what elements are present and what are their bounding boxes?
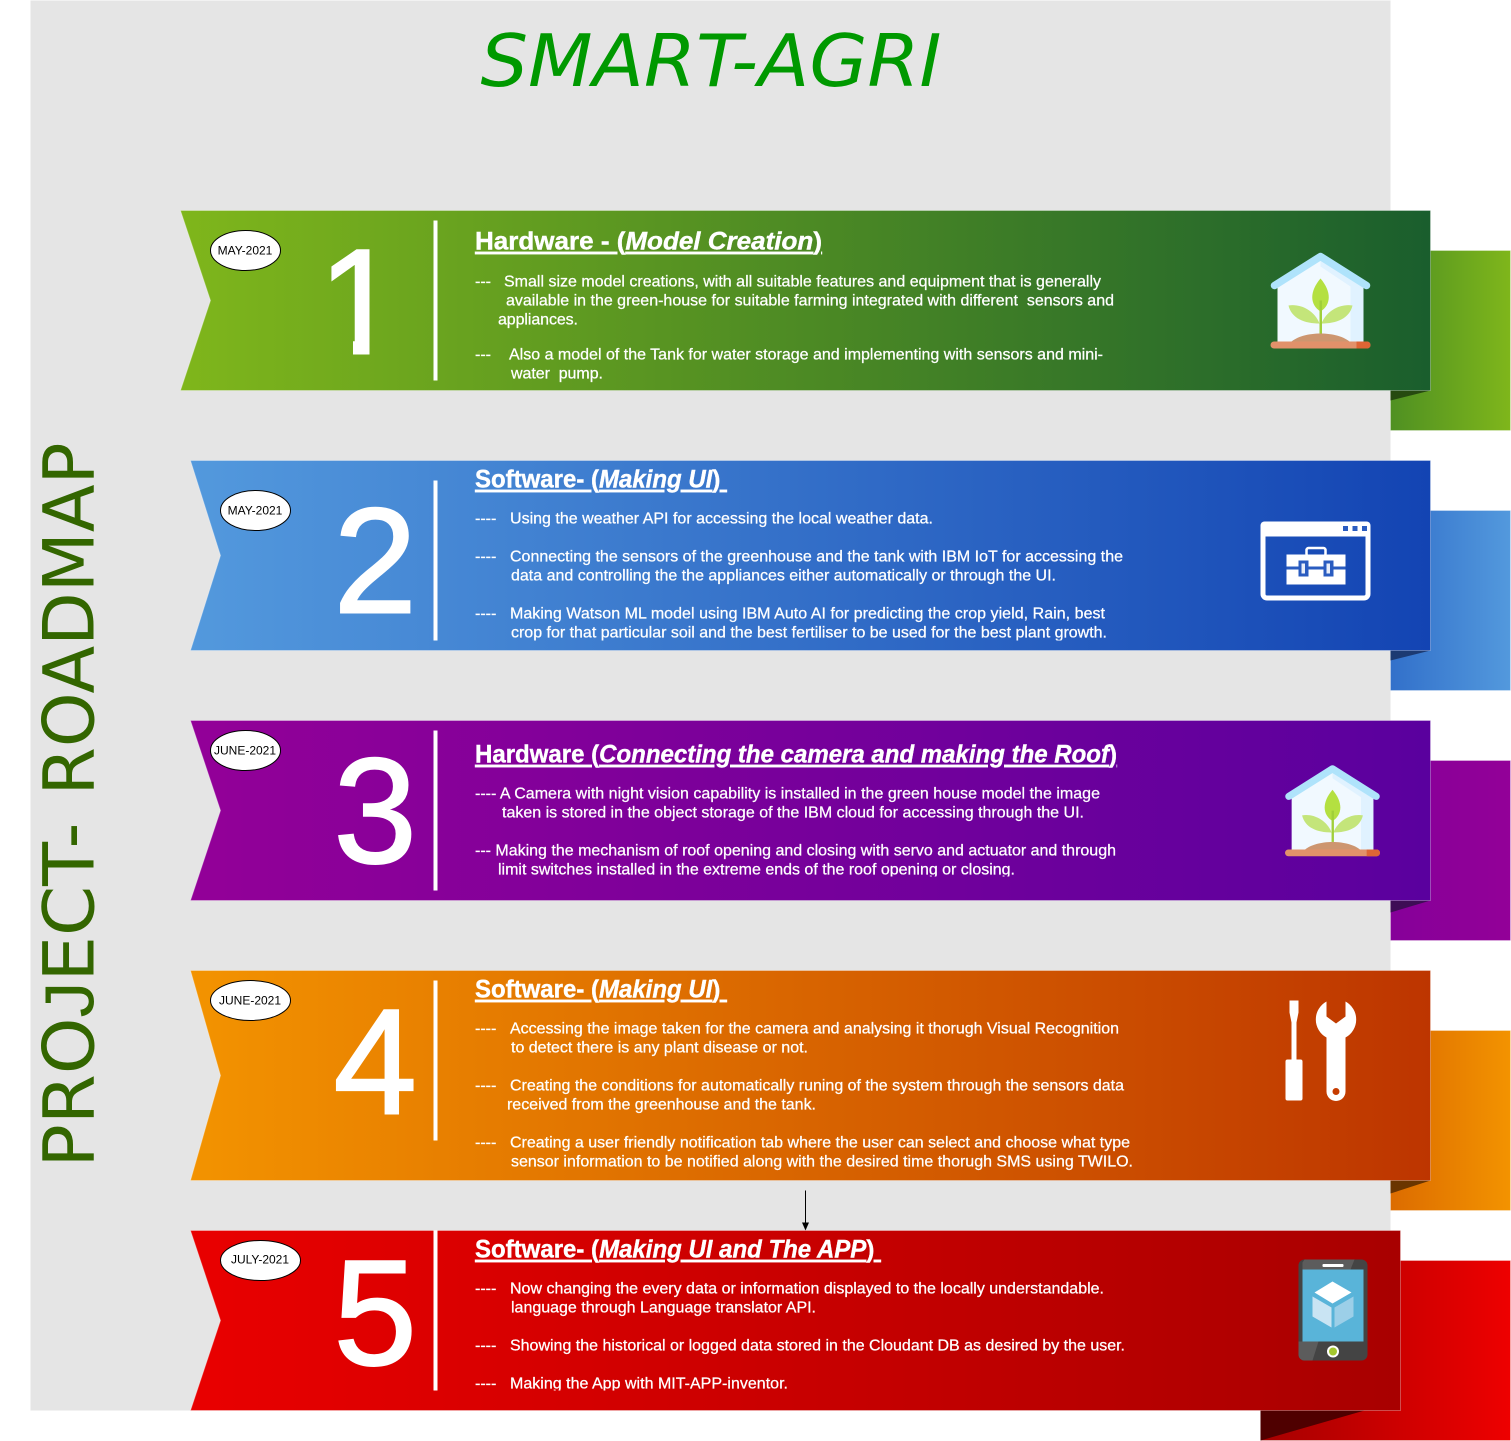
panel: step 3 hardware camera and roof: ---- A Camera with night vision capability is installed in the green house model the image (475, 786, 1100, 803)
panel: step 1 hardware model creation: available in the green-house for suitable farming integrated with different sensors and (506, 293, 1114, 310)
panel: step 2 software making ui: Making Watson ML model using IBM Auto AI for predicting the crop yield, Rain, best (510, 606, 1106, 623)
panel: step 2 software making ui: ---- (475, 549, 496, 566)
panel: step 1 hardware model creation: Small size model creations, with all suitable features and equipment that is generally (504, 274, 1101, 291)
panel: step 3 hardware camera and roof: --- Making the mechanism of roof opening and closing with servo and actuator and through (475, 843, 1116, 860)
panel: step 2 software making ui: crop for that particular soil and the best fertiliser to be used for the best plant growth. (511, 625, 1107, 642)
panel: step 1 hardware model creation: --- (475, 347, 491, 364)
panel: step 1 hardware model creation: --- (475, 274, 491, 291)
icon: toolbox window (1260, 522, 1370, 598)
panel: step 1 hardware model creation: 1 (318, 218, 401, 386)
panel: step 5 software making ui and the app: ---- (475, 1376, 496, 1393)
icon: greenhouse (1270, 256, 1370, 348)
panel: step 4 software making ui: Software- (Making UI) (475, 976, 727, 1004)
panel: step 5 software making ui and the app: Showing the historical or logged data stored in the Cloudant DB as desired by the user. (510, 1338, 1125, 1355)
panel: step 3 hardware camera and roof: taken is stored in the object storage of the IBM cloud for accessing through the UI. (502, 805, 1084, 822)
panel: step 2 software making ui: Using the weather API for accessing the local weather data. (510, 511, 933, 528)
panel: step 4 software making ui: received from the greenhouse and the tank. (507, 1097, 816, 1114)
panel: step 4 software making ui: Accessing the image taken for the camera and analysing it thorugh Visual Recognition (510, 1021, 1119, 1038)
panel: step 1 hardware model creation: appliances. (498, 312, 578, 329)
panel: step 5 software making ui and the app: language through Language translator API. (511, 1300, 816, 1317)
title: SMART-AGRI (480, 19, 942, 103)
icon: tablet with cube (1298, 1260, 1368, 1360)
panel: step 4 software making ui: 4 (334, 978, 417, 1146)
vertical heading: project roadmap (28, 442, 110, 1168)
panel: step 4 software making ui: ---- (475, 1078, 496, 1095)
panel: step 2 software making ui (190, 460, 1510, 690)
icon: screwdriver and wrench (1286, 1000, 1356, 1101)
panel: step 5 software making ui and the app (190, 1228, 1510, 1440)
panel: step 2 software making ui: MAY-2021 (228, 504, 283, 518)
panel: step 2 software making ui: ---- (475, 606, 496, 623)
panel: step 1 hardware model creation (180, 210, 1510, 430)
panel: step 4 software making ui: JUNE-2021 (219, 994, 281, 1008)
panel: step 4 software making ui: Creating the conditions for automatically runing of the system through the sensors data (510, 1078, 1124, 1095)
panel: step 3 hardware camera and roof: JUNE-2021 (214, 744, 276, 758)
icon: greenhouse small (1285, 769, 1380, 856)
panel: step 4 software making ui (190, 970, 1510, 1210)
panel: step 1 hardware model creation: Also a model of the Tank for water storage and implementing with sensors and mini- (509, 347, 1103, 364)
panel: step 1 hardware model creation: Hardware - (Model Creation ) (475, 228, 822, 256)
panel: step 4 software making ui: to detect there is any plant disease or not. (511, 1040, 808, 1057)
vertical heading: project roadmap: PROJECT- (28, 822, 110, 1168)
panel: step 2 software making ui: 2 (334, 476, 417, 644)
panel: step 2 software making ui: ---- (475, 511, 496, 528)
panel: step 5 software making ui and the app: Now changing the every data or information displayed to the locally understandable. (510, 1281, 1104, 1298)
panel: step 3 hardware camera and roof: limit switches installed in the extreme ends of the roof opening or closing. (498, 862, 1015, 879)
panel: step 3 hardware camera and roof: Hardware (Connecting the camera and making the Roof) (475, 741, 1117, 769)
panel: step 5 software making ui and the app: JULY-2021 (231, 1253, 289, 1267)
panel: step 5 software making ui and the app: ---- (475, 1281, 496, 1298)
panel: step 5 software making ui and the app: Making the App with MIT-APP-inventor. (510, 1376, 788, 1393)
panel: step 1 hardware model creation: MAY-2021 (218, 244, 273, 258)
panel: step 1 hardware model creation: water pump. (510, 366, 603, 383)
panel: step 2 software making ui: Software- (Making UI) (475, 466, 727, 494)
panel: step 5 software making ui and the app: 5 (334, 1228, 417, 1396)
panel: step 4 software making ui: ---- (475, 1135, 496, 1152)
vertical heading: project roadmap: ROADMAP (28, 442, 110, 796)
arrow (802, 1190, 809, 1230)
panel: step 2 software making ui: data and controlling the the appliances either automatically or through the UI. (511, 568, 1056, 585)
panel: step 2 software making ui: Connecting the sensors of the greenhouse and the tank with IBM IoT for accessing the (510, 549, 1123, 566)
panel: step 5 software making ui and the app: Software- (Making UI and The APP) (475, 1236, 881, 1264)
panel: step 5 software making ui and the app: ---- (475, 1338, 496, 1355)
panel: step 4 software making ui: ---- (475, 1021, 496, 1038)
panel: step 4 software making ui: sensor information to be notified along with the desired time thorugh SMS using TWILO. (511, 1154, 1133, 1171)
panel: step 3 hardware camera and roof (190, 720, 1510, 940)
panel: step 3 hardware camera and roof: 3 (334, 726, 417, 894)
panel: step 4 software making ui: Creating a user friendly notification tab where the user can select and choose what type (510, 1135, 1130, 1152)
